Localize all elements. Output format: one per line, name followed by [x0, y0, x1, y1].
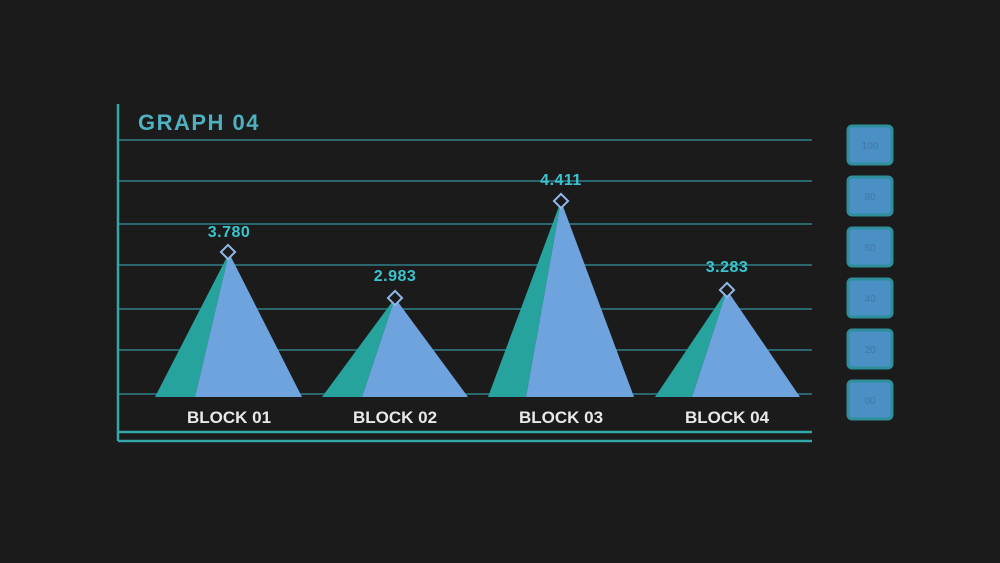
button 20	[848, 330, 892, 368]
bar: block 02: BLOCK 02	[353, 408, 437, 427]
bar: block 04: BLOCK 04	[685, 408, 770, 427]
button 20: 20	[864, 345, 876, 356]
button 60	[848, 228, 892, 266]
button 40: 40	[864, 294, 876, 305]
grid lines	[118, 140, 812, 394]
bar: block 03: 4.411	[540, 172, 582, 189]
bar: block 04: 3.283	[706, 259, 748, 276]
bar: block 02: 2.983	[374, 268, 416, 285]
bar: block 03: BLOCK 03	[519, 408, 603, 427]
bar: block 04	[655, 259, 800, 427]
bar: block 01: BLOCK 01	[187, 408, 271, 427]
button 00: 00	[864, 396, 876, 407]
button 100	[848, 126, 892, 164]
bar: block 03	[488, 172, 634, 427]
button 40	[848, 279, 892, 317]
bar: block 01	[155, 224, 302, 427]
button 80	[848, 177, 892, 215]
button 60: 60	[864, 243, 876, 254]
title: GRAPH 04	[138, 110, 260, 135]
axes	[118, 104, 812, 441]
button 100: 100	[862, 141, 879, 152]
bar: block 02	[322, 268, 468, 427]
button 80: 80	[864, 192, 876, 203]
bar: block 01: 3.780	[208, 224, 250, 241]
button 00	[848, 381, 892, 419]
scale buttons	[848, 126, 892, 419]
